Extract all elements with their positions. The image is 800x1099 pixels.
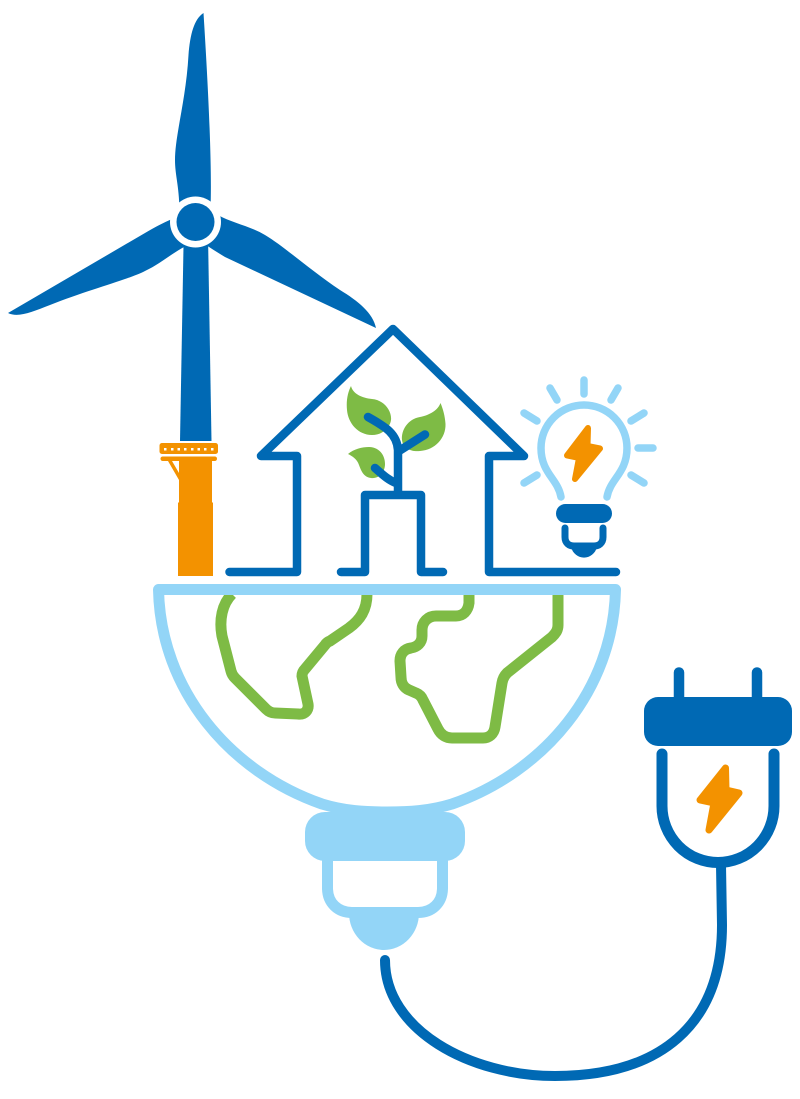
power cable bbox=[385, 865, 722, 1076]
electric plug bbox=[644, 672, 792, 862]
globe bowl outline bbox=[158, 590, 616, 812]
platform brace bbox=[168, 461, 180, 480]
plug body bbox=[662, 754, 774, 862]
bulb collar bbox=[556, 504, 612, 523]
icon: lightning bolt in plug bbox=[700, 768, 739, 830]
turbine tower base bbox=[160, 443, 218, 576]
house door bbox=[341, 495, 443, 572]
socket neck bbox=[328, 858, 442, 912]
house outline bbox=[230, 329, 616, 572]
plug prongs bbox=[679, 672, 757, 700]
socket tip bbox=[349, 913, 419, 950]
leaf: lower bbox=[348, 447, 385, 478]
house walls and roof bbox=[230, 329, 616, 572]
globe bulb bbox=[158, 590, 616, 950]
platform lower bar bbox=[160, 456, 217, 461]
plug head bbox=[644, 697, 792, 746]
turbine blade: right bbox=[206, 215, 376, 328]
platform railing dots bbox=[164, 448, 214, 450]
turbine tower bbox=[180, 235, 212, 441]
turbine hub bbox=[176, 203, 214, 241]
turbine blade: top bbox=[175, 13, 211, 210]
continent: left bbox=[221, 594, 367, 714]
lower tower column bbox=[178, 461, 213, 576]
icon: lightning bolt in bulb bbox=[567, 428, 600, 479]
wind turbine bbox=[8, 13, 376, 576]
turbine hub ring bbox=[170, 196, 221, 248]
socket collar bbox=[305, 812, 465, 861]
leaf: right bbox=[402, 403, 446, 451]
bulb tip bbox=[571, 547, 597, 558]
bulb glass bbox=[541, 405, 627, 497]
turbine blade: left bbox=[8, 219, 186, 315]
leaf: upper left bbox=[347, 386, 391, 435]
platform deck bbox=[160, 443, 218, 454]
light bulb bbox=[524, 380, 653, 558]
bulb screw base bbox=[565, 528, 603, 546]
continent: right bbox=[400, 594, 558, 738]
plant bbox=[347, 386, 446, 492]
plant stem and branches bbox=[368, 417, 425, 492]
bulb light rays bbox=[524, 380, 653, 483]
